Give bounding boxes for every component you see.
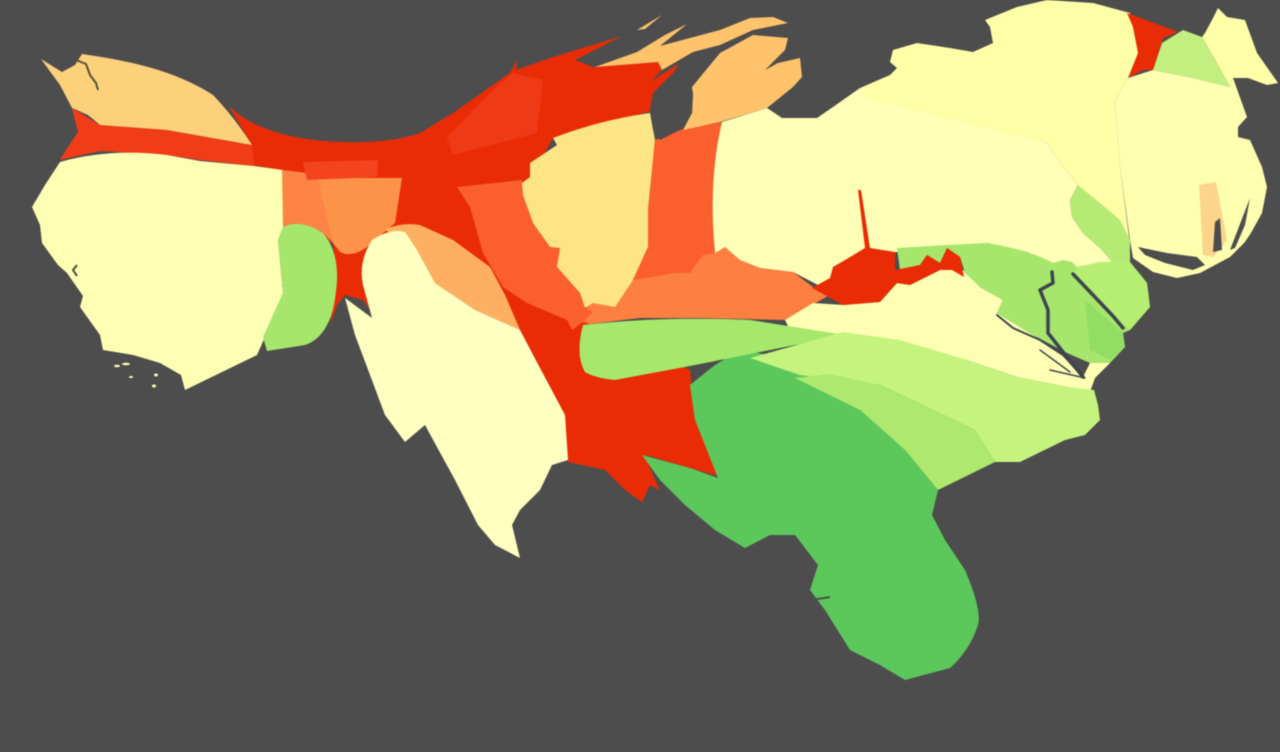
region: western green state [263,224,337,351]
region: southern New England pale yellow [1115,70,1267,278]
detail: Tampa Bay inlet [812,597,830,600]
region: Vermont red [1127,13,1178,78]
detail: Long Island Sound and coastal inlets [1138,198,1262,270]
region: Georgia, Alabama and Florida green [642,350,979,680]
region: upper Michigan light orange [595,17,788,70]
region: South Carolina green [795,374,995,490]
region: New York yellow [860,0,1140,245]
region: lower Michigan light orange [683,35,802,130]
region: Ohio pale yellow [713,88,885,285]
region: mountain orange state [282,170,333,243]
region: Maine pale yellow [1202,8,1278,87]
region: Missouri-like orange-red state [457,180,593,330]
region: Lake Michigan [650,63,693,140]
region: Connecticut-like orange strip [1199,182,1227,257]
region: northwest red band [60,108,254,166]
region: Pennsylvania pale yellow [852,100,1115,270]
region: Illinois light yellow-orange [522,113,655,308]
region: northwest light orange state [41,54,252,145]
region: Tennessee green [579,319,845,380]
region: eastern light green block [1073,262,1150,330]
detail: Puget Sound inlet [76,60,98,90]
region: Kentucky orange [583,247,828,324]
region: North Carolina light green [750,332,1100,462]
detail: Delaware Bay and Chesapeake Bay [997,272,1123,378]
detail: channel islands [114,363,158,388]
region: dark orange-red northern strip [303,160,378,180]
detail: thin island sliver [637,15,662,30]
region: west coast pale yellow state [32,153,284,390]
region: Texas pale yellow [345,231,568,558]
region: darker green Delmarva segment [1085,300,1125,360]
region: plains light orange state [385,224,520,330]
region: Indiana orange-red [633,122,722,280]
region: New Hampshire green [1153,30,1230,87]
region: central red band and lower Mississippi [228,36,718,502]
region: Virginia pale yellow [785,270,1110,392]
region: West Virginia red [812,190,964,305]
region: lighter red north-central patch [447,73,543,155]
region: Maryland and Delaware green [897,243,1150,363]
region: central orange state [318,178,402,254]
region: New Jersey green [1070,185,1130,264]
detail: coastal inlet [73,265,77,276]
